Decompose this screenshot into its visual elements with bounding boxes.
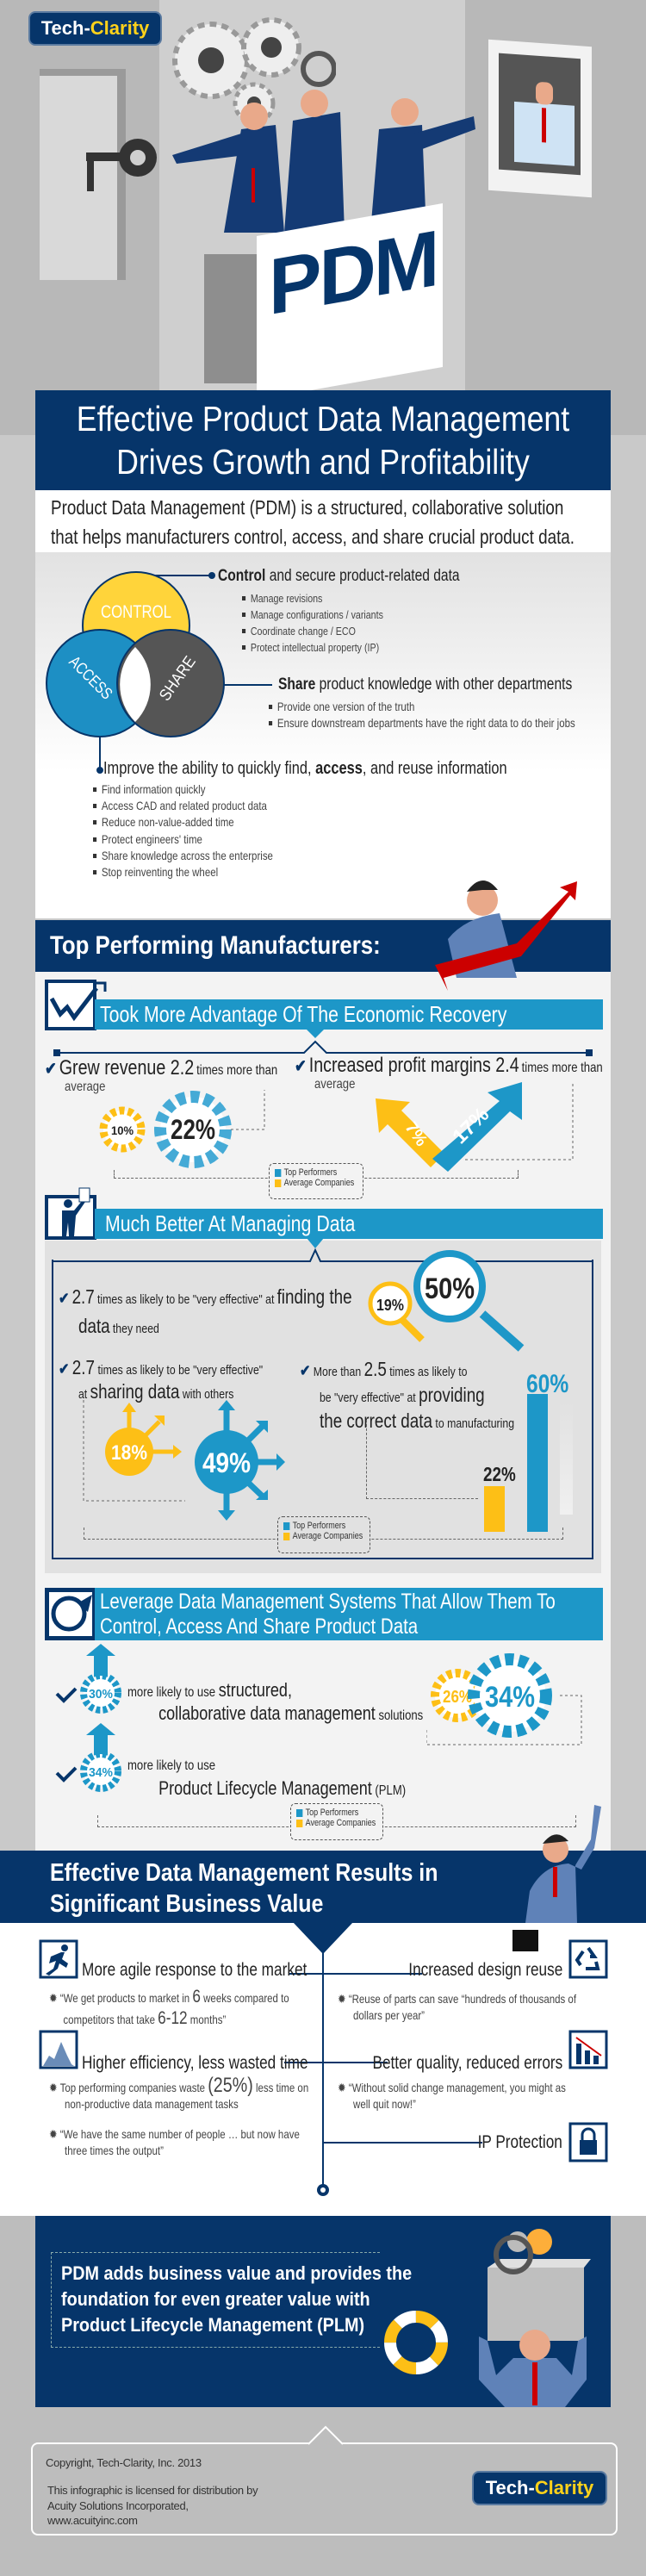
item: efficiency: ✹ Top performing companies waste (25%) less time on: [49, 2074, 308, 2097]
chart: magnifiers 19% 50%: [369, 1250, 524, 1352]
chart: arrows 7% 17%: 7%: [401, 1118, 431, 1150]
icon: presenter: [45, 1187, 96, 1240]
icon: key: [86, 139, 157, 191]
legend 1: [269, 1163, 363, 1199]
timeline: [284, 1953, 482, 2196]
list: access bullets: Share knowledge across the enterprise: [102, 849, 273, 862]
legend 2: Average Companies: [293, 1531, 363, 1541]
section: economic recovery: [45, 980, 603, 1030]
venn diagram: SHARE: [156, 653, 200, 705]
heading: business value: [0, 1851, 646, 1923]
text: conclusion: [61, 2261, 412, 2338]
text: grew revenue: [45, 1056, 277, 1094]
icon: cycle: [45, 1588, 95, 1640]
legend 3: Top Performers: [306, 1808, 358, 1818]
legend 2: Top Performers: [293, 1521, 345, 1531]
section: managing data: [45, 1187, 603, 1240]
icon: runner: [40, 1940, 78, 1978]
item: quality: Better quality, reduced errors: [372, 2053, 562, 2073]
chart: arrows 7% 17%: [376, 1082, 574, 1172]
icon: gears: [172, 17, 336, 120]
item: efficiency: three times the output”: [65, 2144, 164, 2157]
legend 3: Average Companies: [306, 1818, 376, 1828]
chart: arrows 7% 17%: 17%: [448, 1103, 494, 1148]
venn diagram: [46, 571, 272, 774]
chart: magnifiers 19% 50%: 19%: [376, 1297, 404, 1314]
item: quality: [336, 2030, 608, 2107]
chart: arrow gears 30% 34%: 34%: [89, 1765, 113, 1780]
list: control bullets: Manage configurations / variants: [251, 608, 383, 621]
item: efficiency: [40, 2030, 308, 2157]
header bar: Control, Access And Share Product Data: [100, 1615, 418, 1639]
icon: man raising fist: [512, 1805, 601, 1951]
white results area: [0, 1923, 646, 2216]
text: providing data: ✔ More than 2.5 times as likely to: [300, 1358, 467, 1380]
heading: business value: Significant Business Value: [50, 1890, 323, 1918]
item: quality: well quit now!”: [353, 2097, 416, 2111]
legend 1: Top Performers: [284, 1167, 337, 1178]
window with man: [488, 40, 592, 197]
text: grew revenue: average: [65, 1080, 105, 1094]
text: access: Improve the ability to quickly find, access, and reuse information: [103, 759, 507, 778]
text: license: Acuity Solutions Incorporated,: [47, 2498, 189, 2512]
text: increased profit: average: [314, 1077, 355, 1092]
list: access bullets: Reduce non-value-added time: [102, 815, 234, 829]
header bar: [95, 1588, 603, 1640]
divider with notch: [53, 1030, 593, 1056]
heading: top performing manufacturers: Top Performing Manufacturers:: [50, 931, 381, 960]
header bar: Took More Advantage Of The Economic Recovery: [100, 1001, 506, 1027]
text: conclusion: PDM adds business value and provides the: [61, 2262, 412, 2284]
panel: venn section: [35, 552, 611, 918]
item: agile response: ✹ “We get products to market in 6 weeks compared to: [49, 1987, 289, 2007]
legend 2: [277, 1516, 370, 1553]
subtitle: [35, 490, 611, 552]
chart: share arrows 18% 49%: 49%: [202, 1447, 251, 1478]
chart: bars 22% 60%: 22%: [483, 1463, 516, 1485]
icon: declining bars: [568, 2030, 608, 2069]
item: design reuse: Increased design reuse: [408, 1960, 562, 1980]
logo: [28, 11, 162, 46]
text: sharing data: at sharing data with others: [78, 1380, 233, 1403]
text: license: [47, 2483, 258, 2528]
heading: top performing manufacturers: [35, 920, 611, 972]
text: conclusion: Product Lifecycle Management (PLM): [61, 2314, 364, 2336]
list: share bullets: [269, 700, 575, 730]
text: license: This infographic is licensed for distribution by: [47, 2484, 258, 2497]
item: agile response: [40, 1940, 307, 2028]
item: efficiency: ✹ “We have the same number of people … but now have: [49, 2127, 300, 2141]
icon: chart box: [45, 980, 107, 1030]
icon: mountain chart: [39, 2030, 78, 2069]
item: agile response: More agile response to the market: [82, 1960, 307, 1980]
list: access bullets: [93, 782, 273, 879]
list: access bullets: Stop reinventing the wheel: [102, 865, 218, 879]
text: finding data: ✔ 2.7 times as likely to be "very effective" at finding the: [59, 1285, 352, 1308]
text: grew revenue: ✔ Grew revenue 2.2 times more than: [45, 1056, 277, 1080]
heading: business value: Effective Data Management Results in: [50, 1859, 438, 1887]
chart: gears 10% 22%: 22%: [171, 1114, 215, 1145]
chart: share arrows 18% 49%: 18%: [111, 1441, 147, 1465]
text: structured solutions: [127, 1679, 423, 1724]
icon: man with red arrow: [435, 880, 577, 991]
icon: cycle arrows: [376, 2302, 457, 2384]
chart: gears 26% 34%: 34%: [485, 1681, 535, 1714]
logo: Tech-Clarity: [486, 2477, 593, 2498]
logo: Tech-Clarity: [41, 17, 149, 39]
text: structured solutions: collaborative data management solutions: [158, 1702, 423, 1724]
item: IP protection: IP Protection: [478, 2132, 562, 2152]
item: design reuse: dollars per year”: [353, 2008, 425, 2022]
panel: top performers content bg: [35, 972, 611, 1852]
text: providing data: [300, 1358, 514, 1432]
panel: managing data box: [52, 1260, 593, 1559]
title banner: [35, 390, 611, 490]
list: share bullets: Ensure downstream departments have the right data to do their jobs: [277, 716, 575, 730]
logo: [472, 2471, 607, 2505]
hero illustration: [0, 0, 646, 435]
text: copyright: Copyright, Tech-Clarity, Inc. 2013: [46, 2456, 202, 2469]
footer: [31, 2442, 618, 2536]
people: [172, 90, 475, 233]
PDM box: [204, 254, 260, 383]
text: providing data: the correct data to manufacturing: [320, 1409, 514, 1432]
header bar: [95, 1209, 603, 1239]
text: conclusion: foundation for even greater value with: [61, 2288, 370, 2310]
venn diagram: ACCESS: [65, 653, 115, 703]
chart: gears 10% 22%: 10%: [111, 1123, 134, 1137]
panel: PLM conclusion: [35, 2216, 611, 2407]
header bar: Much Better At Managing Data: [105, 1210, 355, 1236]
legend 3: [290, 1803, 383, 1840]
text: sharing data: [59, 1356, 263, 1403]
list: control bullets: Manage revisions: [251, 592, 322, 605]
title banner: Drives Growth and Profitability: [116, 442, 530, 482]
icon: man holding box: [470, 2207, 599, 2407]
chart: arrow gears 30% 34%: [55, 1644, 121, 1792]
text: sharing data: ✔ 2.7 times as likely to be "very effective": [59, 1356, 263, 1378]
chart: bars 22% 60%: 60%: [526, 1370, 568, 1398]
item: quality: ✹ “Without solid change management, you might as: [338, 2081, 566, 2094]
item: design reuse: ✹ “Reuse of parts can save “hundreds of thousands of: [338, 1992, 576, 2006]
text: structured solutions: more likely to use structured,: [127, 1679, 292, 1701]
text: increased profit: ✔ Increased profit margins 2.4 times more than: [295, 1054, 603, 1077]
header bar: Leverage Data Management Systems That Allow Them To: [100, 1590, 556, 1614]
text: PLM: [127, 1758, 406, 1799]
item: efficiency: non-productive data management tasks: [65, 2097, 239, 2111]
header bar: [95, 999, 603, 1030]
item: IP protection: [482, 2122, 608, 2162]
chart: gears 26% 34%: [426, 1653, 582, 1745]
subtitle: Product Data Management (PDM) is a structured, collaborative solution: [51, 496, 563, 519]
title banner: Effective Product Data Management: [77, 399, 569, 439]
chart: magnifiers 19% 50%: 50%: [425, 1272, 475, 1305]
item: efficiency: Higher efficiency, less wasted time: [82, 2053, 308, 2073]
list: access bullets: Protect engineers' time: [102, 832, 202, 846]
hero illustration: PDM: [269, 215, 437, 332]
text: license: www.acuityinc.com: [47, 2514, 138, 2527]
text: share: Share product knowledge with other departments: [278, 675, 572, 694]
list: share bullets: Provide one version of the truth: [277, 700, 414, 713]
notch: [294, 1923, 352, 1953]
subtitle: that helps manufacturers control, access, and share crucial product data.: [51, 526, 575, 548]
list: access bullets: Access CAD and related product data: [102, 799, 267, 812]
icon: lock: [568, 2122, 608, 2162]
chart: share arrows 18% 49%: [83, 1400, 285, 1521]
chart: gears 10% 22%: [100, 1090, 265, 1168]
text: PLM: Product Lifecycle Management (PLM): [158, 1777, 406, 1799]
text: control: Control and secure product-related data: [218, 567, 460, 585]
chart: bars 22% 60%: [366, 1370, 573, 1532]
venn diagram: CONTROL: [101, 602, 171, 622]
text: finding data: [59, 1285, 352, 1337]
list: control bullets: Protect intellectual property (IP): [251, 641, 379, 654]
legend 1: Average Companies: [284, 1178, 354, 1188]
list: access bullets: Find information quickly: [102, 782, 205, 796]
list: control bullets: [242, 592, 383, 654]
text: increased profit: [295, 1054, 603, 1092]
text: finding data: data they need: [78, 1315, 159, 1337]
item: design reuse: [338, 1940, 608, 2022]
text: PLM: more likely to use: [127, 1758, 215, 1773]
section: leverage systems: [45, 1588, 603, 1640]
list: control bullets: Coordinate change / ECO: [251, 625, 356, 638]
chart: gears 26% 34%: 26%: [443, 1688, 472, 1707]
text: competitors that take 6-12 months”: [63, 2008, 226, 2028]
side background: [0, 435, 646, 1857]
door: [40, 69, 126, 280]
icon: recycle: [568, 1940, 608, 1978]
text: providing data: be "very effective" at providing: [320, 1384, 485, 1406]
chart: arrow gears 30% 34%: 30%: [89, 1687, 113, 1702]
